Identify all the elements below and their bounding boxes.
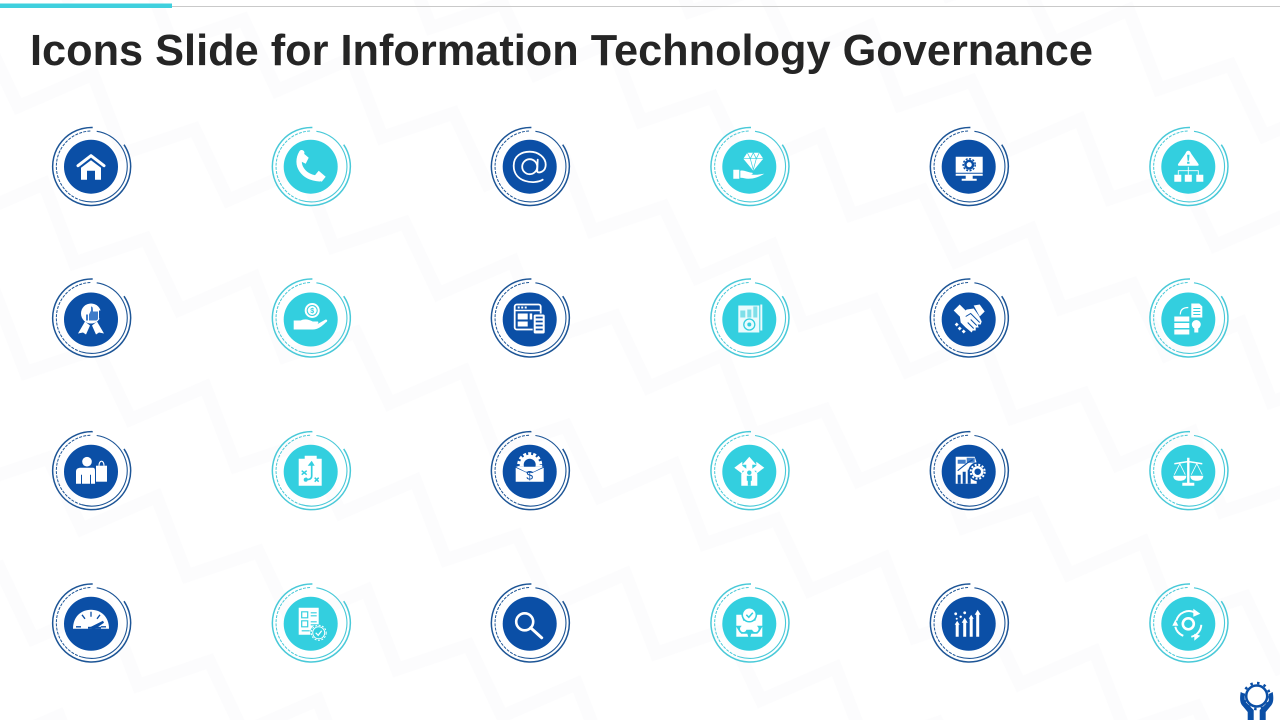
icon: customer with shopping bag xyxy=(53,432,131,510)
icon: analytics report with gear xyxy=(930,432,1008,510)
icon: circular process xyxy=(1150,584,1228,662)
icon: checklist with badge xyxy=(272,584,350,662)
icon: gear briefcase with dollar: $ xyxy=(526,469,533,483)
icon: coin over hand xyxy=(272,279,350,357)
icon: warning hierarchy xyxy=(1150,127,1228,205)
icon: clipboard strategy xyxy=(272,432,350,510)
icon: rising bars with arrows xyxy=(930,584,1008,662)
title: Icons Slide for Information Technology Governance xyxy=(30,26,1093,75)
icon: server, document and idea xyxy=(1150,279,1228,357)
icon: balance scales xyxy=(1150,432,1228,510)
icon: award with thumbs up xyxy=(53,279,131,357)
icon: magnifying glass xyxy=(491,584,569,662)
icon: handshake xyxy=(930,279,1008,357)
icon: person choosing directions xyxy=(711,432,789,510)
icon: speedometer xyxy=(53,584,131,662)
icon: at sign xyxy=(491,127,569,205)
icon: people with approval xyxy=(711,584,789,662)
icon: diamond on hand xyxy=(711,127,789,205)
icon: gear briefcase with dollar xyxy=(491,432,569,510)
icon: document with chart and gear xyxy=(711,279,789,357)
icon: home xyxy=(53,127,131,205)
header rule xyxy=(0,4,1280,8)
logo: hands holding gear xyxy=(1240,683,1273,720)
icon: telephone xyxy=(272,127,350,205)
icon: monitor with gear xyxy=(930,127,1008,205)
icon: browser and mobile xyxy=(491,279,569,357)
icon: coin over hand: $ xyxy=(310,308,314,315)
